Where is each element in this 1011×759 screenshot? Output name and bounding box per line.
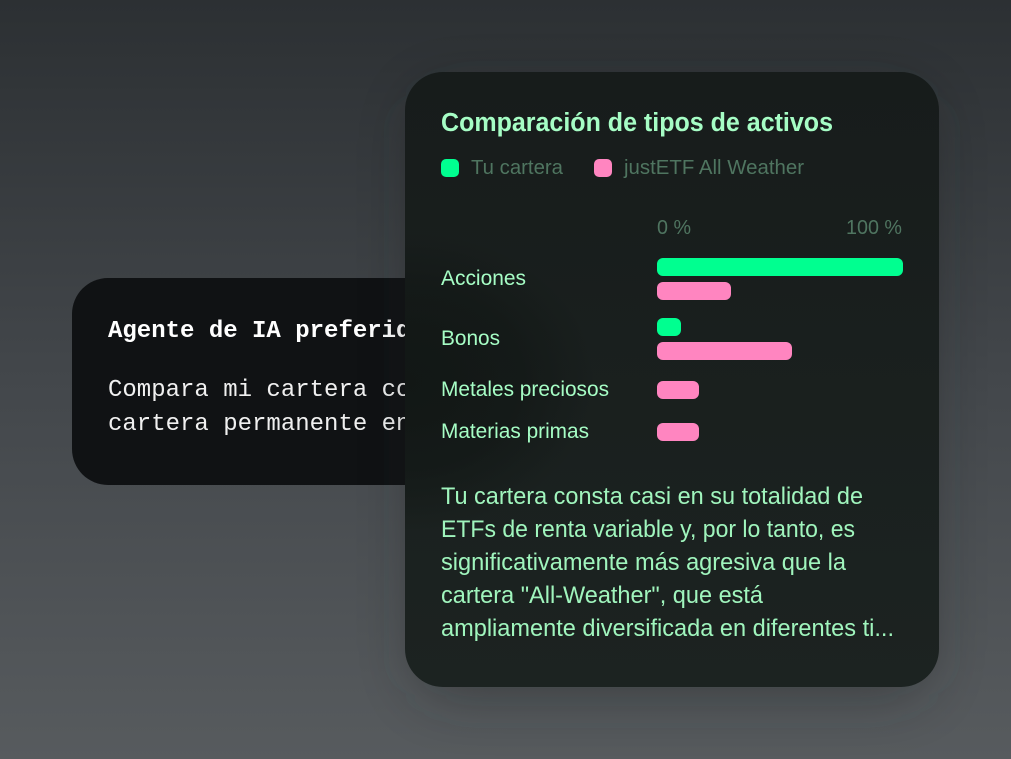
category labels: Materias primas <box>441 420 589 443</box>
prompt text <box>108 377 425 438</box>
summary text: ampliamente diversificada en diferentes ti... <box>441 615 894 642</box>
prompt heading: Agente de IA preferido <box>108 318 425 345</box>
summary text: significativamente más agresiva que la <box>441 549 847 576</box>
legend: Tu cartera <box>471 156 564 179</box>
category labels: Metales preciosos <box>441 378 609 401</box>
legend <box>441 156 804 179</box>
category labels: Bonos <box>441 327 500 350</box>
summary text: cartera "All-Weather", que está <box>441 582 764 609</box>
prompt text: cartera permanente en <box>108 411 410 438</box>
bars <box>657 258 903 441</box>
legend: justETF All Weather <box>623 156 804 179</box>
summary text: ETFs de renta variable y, por lo tanto, es <box>441 516 855 543</box>
panel: asset comparison card <box>405 72 939 687</box>
axis labels: 100 % <box>846 216 902 239</box>
summary text <box>441 483 894 642</box>
category labels <box>441 267 609 443</box>
card shadow <box>415 92 929 697</box>
heading: Comparación de tipos de activos <box>441 109 833 137</box>
panel: prompt card <box>72 278 492 485</box>
summary text: Tu cartera consta casi en su totalidad de <box>441 483 863 510</box>
prompt text: Compara mi cartera con <box>108 377 425 404</box>
axis labels: 0 % <box>657 216 691 239</box>
axis labels <box>657 216 902 239</box>
bar chart <box>441 258 903 443</box>
category labels: Acciones <box>441 267 526 290</box>
